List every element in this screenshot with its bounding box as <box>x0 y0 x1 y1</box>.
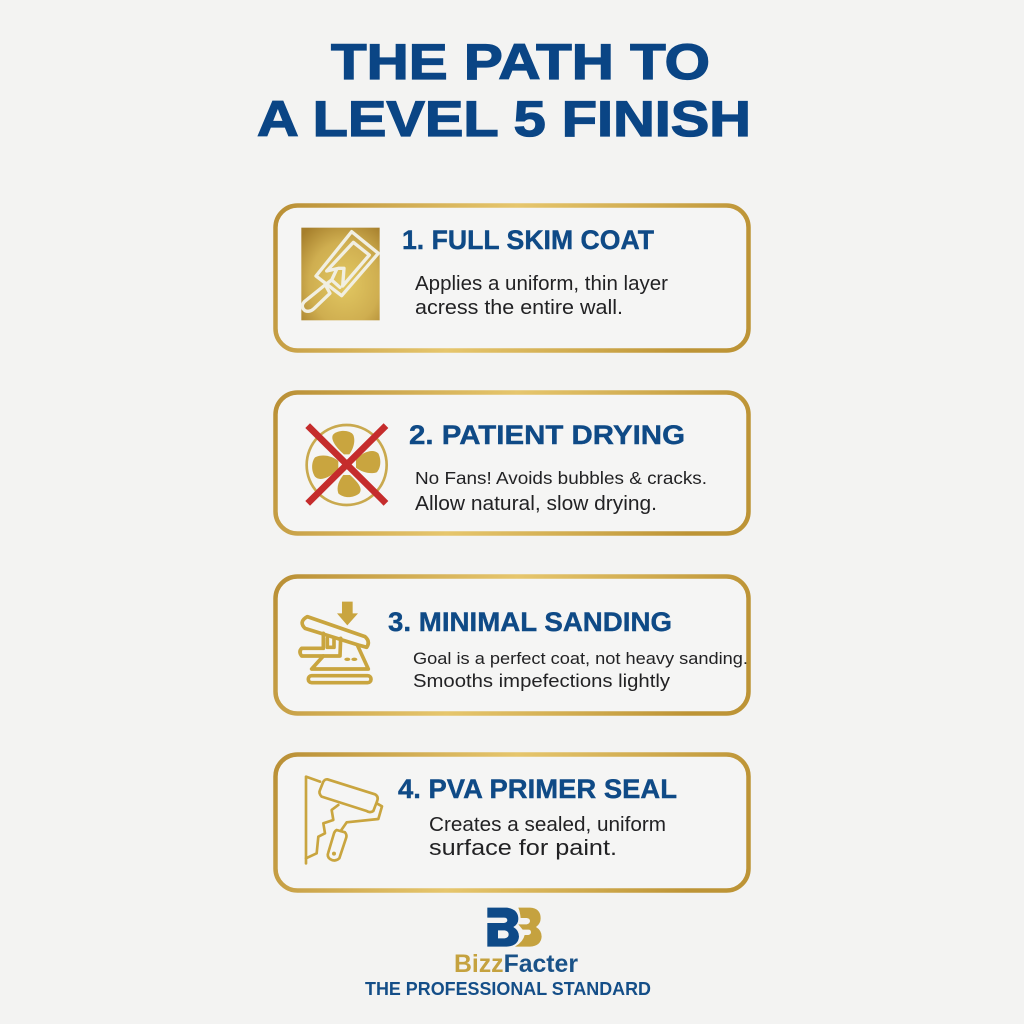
description 1: acress the entire wall. <box>415 297 623 319</box>
icon: double B monogram <box>487 908 542 947</box>
tagline: THE PROFESSIONAL STANDARD <box>365 979 651 999</box>
heading 3: 3. MINIMAL SANDING <box>388 607 672 637</box>
title <box>257 34 751 147</box>
description 4 <box>429 814 666 860</box>
heading 2: 2. PATIENT DRYING <box>409 420 685 450</box>
brand name: BizzFacter <box>454 950 578 978</box>
icon: paint roller <box>306 777 382 863</box>
description 4: surface for paint. <box>429 835 617 860</box>
title: A LEVEL 5 FINISH <box>257 91 751 147</box>
icon: trowel on gold square <box>301 228 380 320</box>
icon: crossed out fan <box>307 425 387 505</box>
logo: BizzFacter <box>365 908 651 999</box>
description 2 <box>415 468 707 515</box>
description 2: No Fans! Avoids bubbles & cracks. <box>415 468 707 488</box>
icon: sander with arrow <box>300 602 371 683</box>
panel: pva primer seal <box>276 754 748 890</box>
description 1 <box>415 273 668 319</box>
description 3: Smooths impefections lightly <box>413 671 670 691</box>
heading 4: 4. PVA PRIMER SEAL <box>398 774 677 804</box>
panel: patient drying <box>276 392 748 534</box>
heading 1: 1. FULL SKIM COAT <box>402 225 654 255</box>
description 3 <box>413 649 748 691</box>
panel: full skim coat <box>276 206 748 350</box>
description 1: Applies a uniform, thin layer <box>415 273 668 295</box>
description 3: Goal is a perfect coat, not heavy sanding. <box>413 649 748 668</box>
panel: minimal sanding <box>276 576 748 714</box>
description 2: Allow natural, slow drying. <box>415 493 657 515</box>
description 4: Creates a sealed, uniform <box>429 814 666 836</box>
title: THE PATH TO <box>331 34 710 90</box>
